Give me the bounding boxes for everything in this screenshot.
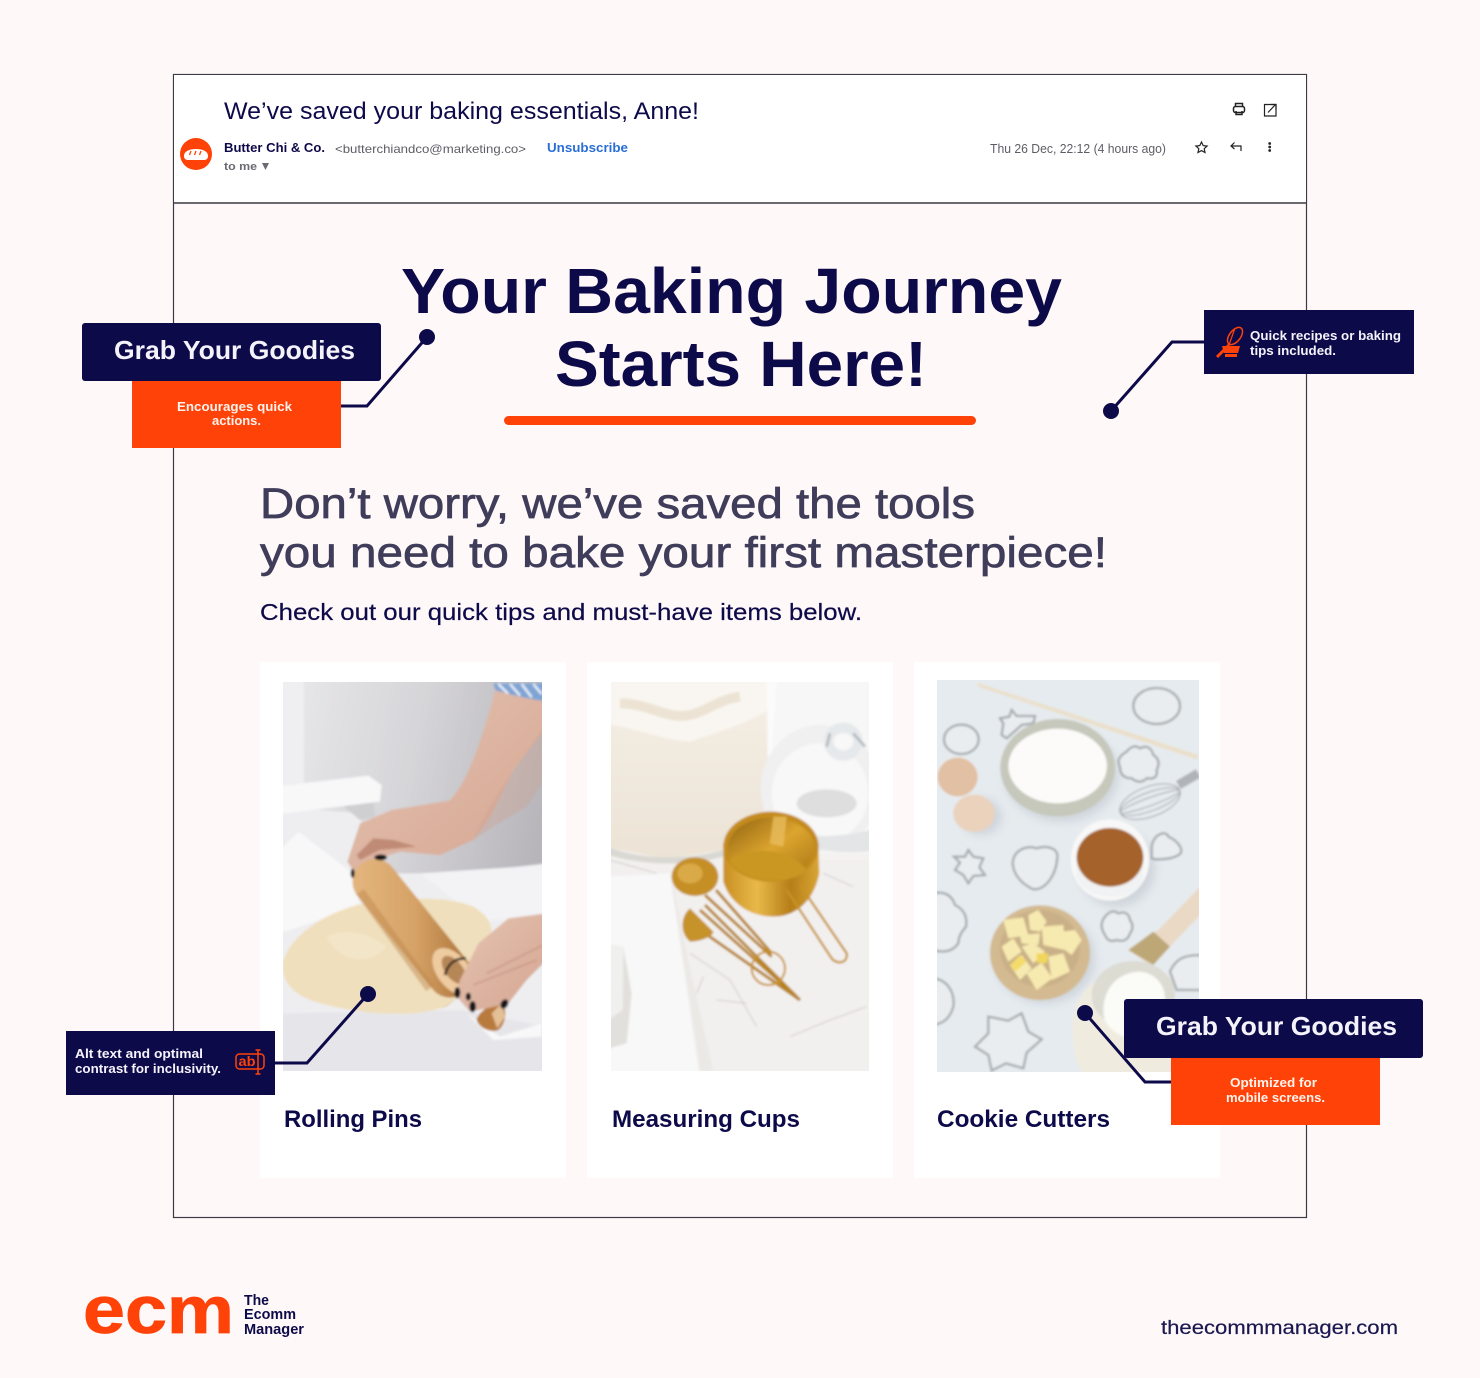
heading: Your Baking Journey [401, 255, 1062, 327]
icon: open in new window [1264, 104, 1276, 116]
icon: dropdown arrow [262, 163, 269, 170]
panel: product card rolling pins [283, 682, 542, 1132]
orange note: Encourages quick [177, 399, 293, 414]
orange note [1171, 1058, 1380, 1125]
sender name: Butter Chi & Co. [224, 140, 325, 155]
logo: the ecomm manager: Manager [244, 1322, 304, 1338]
panel: email frame [173, 74, 1307, 1218]
body text: Check out our quick tips and must-have items below. [260, 599, 862, 625]
callout: alt text [66, 986, 376, 1095]
logo: the ecomm manager: The [244, 1293, 269, 1309]
icon: whisk and bowl [1217, 325, 1245, 357]
logo: the ecomm manager [83, 1273, 304, 1348]
connector arrow [1077, 1005, 1171, 1082]
subheading: you need to bake your first masterpiece! [260, 529, 1107, 577]
sender email: <butterchiandco@marketing.co> [335, 142, 526, 156]
photo: rolling pin and dough [280, 680, 547, 1077]
callout: grab your goodies bottom right [1077, 999, 1423, 1125]
unsubscribe link: Unsubscribe [547, 140, 628, 155]
panel: product card measuring cups [611, 690, 869, 1132]
date: Thu 26 Dec, 22:12 (4 hours ago) [990, 142, 1166, 156]
icon: more menu [1268, 142, 1271, 152]
website url: theecommmanager.com [1161, 1318, 1398, 1339]
connector arrow [275, 986, 376, 1063]
callout: quick recipes [1103, 310, 1414, 419]
heading: Starts Here! [555, 328, 927, 400]
heading [401, 255, 1062, 400]
email subject: We’ve saved your baking essentials, Anne! [224, 98, 699, 125]
icon: star [1196, 142, 1207, 153]
icon: alt text [236, 1050, 264, 1074]
panel: product card cookie cutters [937, 680, 1199, 1127]
heading underline [504, 416, 976, 425]
orange note: actions. [212, 413, 261, 428]
icon: reply [1231, 142, 1241, 151]
connector arrow [341, 329, 435, 406]
card label: Rolling Pins [284, 1106, 422, 1133]
connector arrow [1103, 342, 1204, 419]
orange note [132, 381, 341, 448]
photo: measuring cups and flour [611, 682, 869, 1071]
subheading [260, 480, 1107, 577]
note box [1204, 310, 1414, 374]
callout: grab your goodies top left [82, 323, 435, 448]
icon: printer [1234, 104, 1244, 114]
button: Grab Your Goodies [114, 335, 355, 365]
button: Grab Your Goodies [1156, 1011, 1397, 1041]
button [82, 323, 381, 381]
note box: Alt text and optimal [75, 1046, 203, 1061]
card label: Cookie Cutters [937, 1106, 1110, 1133]
recipient: to me [224, 161, 257, 173]
panel: email header [173, 75, 1307, 203]
note box: tips included. [1250, 343, 1336, 358]
orange note: Optimized for [1230, 1075, 1317, 1090]
photo: baking ingredients and cookie cutters [930, 673, 1207, 1080]
logo: the ecomm manager: Ecomm [244, 1307, 296, 1323]
note box: Quick recipes or baking [1250, 328, 1401, 343]
subheading: Don’t worry, we’ve saved the tools [260, 480, 975, 528]
icon: alt text: ab [238, 1053, 256, 1069]
note box: contrast for inclusivity. [75, 1061, 221, 1076]
note box [66, 1031, 275, 1095]
logo: the ecomm manager: ecm [83, 1273, 234, 1348]
card label: Measuring Cups [612, 1106, 800, 1133]
button [1124, 999, 1423, 1058]
orange note: mobile screens. [1226, 1090, 1325, 1105]
icon: sender avatar [180, 138, 212, 170]
